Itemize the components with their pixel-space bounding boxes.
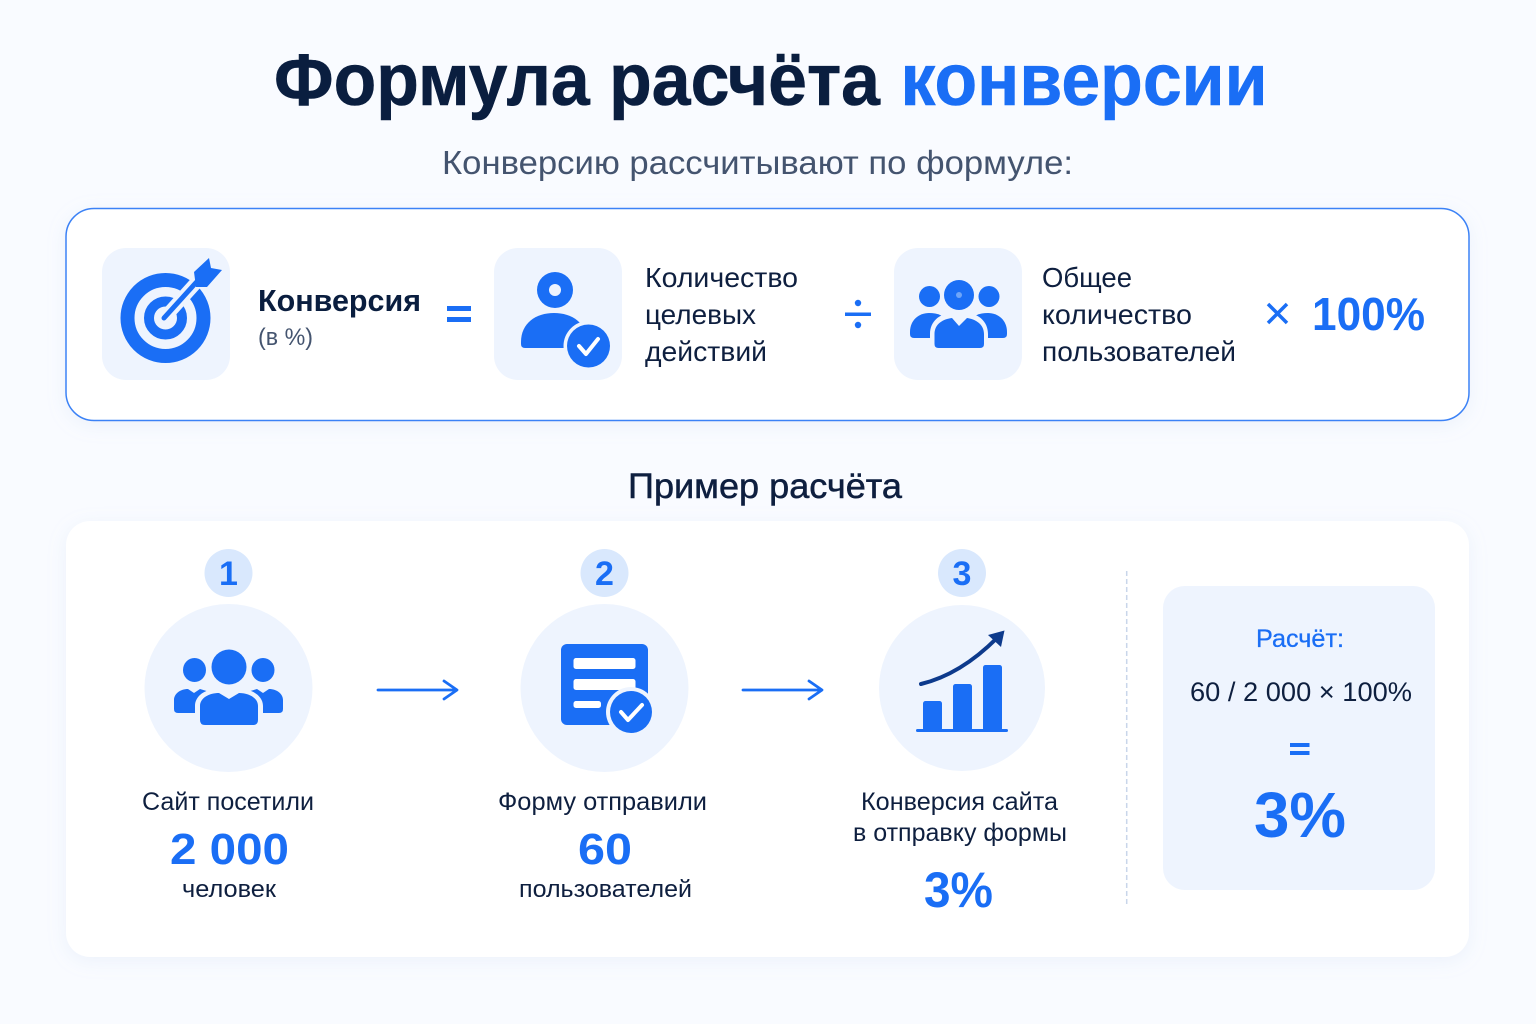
label: conversion [258, 283, 421, 351]
label: conversion: Конверсия [258, 283, 421, 318]
arrow 2 [743, 681, 822, 699]
text: step 2: пользователей [519, 876, 692, 903]
text: step 1: человек [182, 876, 277, 903]
badge 2 [580, 549, 628, 597]
text: target actions: целевых [645, 299, 756, 330]
text: step 2: 60 [578, 825, 632, 874]
icon: users group [894, 248, 1022, 380]
text: step 1: 2 000 [170, 825, 289, 874]
text: step 3: в отправку формы [853, 819, 1067, 847]
operator: divide [845, 300, 871, 328]
title [274, 40, 1268, 121]
text: total users: пользователей [1042, 336, 1236, 367]
value: 100%: 100% [1312, 288, 1425, 340]
badge 3 [938, 549, 986, 597]
panel: example [66, 521, 1469, 957]
text: target actions: Количество [645, 262, 798, 293]
text: step 2: Форму отправили [498, 788, 707, 816]
operator: multiply [1268, 304, 1287, 323]
text: total users: количество [1042, 299, 1192, 330]
text: step 3: Конверсия сайта [861, 788, 1058, 816]
badge 2: 2 [595, 555, 614, 593]
text: step 3: 3% [924, 862, 993, 918]
text: total users [1042, 262, 1236, 367]
result equals [1290, 743, 1310, 755]
badge 1: 1 [219, 555, 238, 593]
heading: example: Пример расчёта [628, 467, 903, 506]
step 3 [853, 549, 1067, 918]
text: step 1: Сайт посетили [142, 788, 314, 816]
text: total users: Общее [1042, 262, 1132, 293]
panel: formula [66, 208, 1469, 420]
panel: calculation result [1163, 586, 1435, 890]
title: конверсии [900, 40, 1268, 121]
text: step 1 [142, 788, 314, 903]
step 1 [142, 549, 314, 903]
text: target actions: действий [645, 336, 767, 367]
badge 3: 3 [953, 555, 971, 593]
badge 1 [204, 549, 252, 597]
result value: 3% [1254, 779, 1346, 851]
subtitle: Конверсию рассчитывают по формуле: [442, 144, 1073, 181]
calculation expression: 60 / 2 000 × 100% [1190, 677, 1412, 707]
title: Формула расчёта [274, 40, 881, 121]
operator: equals [447, 306, 471, 322]
icon: user with check [494, 248, 622, 380]
arrow 1 [378, 681, 457, 699]
label: conversion: (в %) [258, 324, 313, 351]
text: step 2 [498, 788, 707, 903]
icon: target [102, 248, 230, 380]
text: target actions [645, 262, 798, 367]
icon: visitors [144, 604, 312, 772]
step 2 [498, 549, 707, 903]
icon: form with check [520, 604, 688, 772]
calculation label: Расчёт: [1256, 625, 1344, 653]
text: step 3 [853, 788, 1067, 918]
icon: growth chart [879, 605, 1045, 771]
